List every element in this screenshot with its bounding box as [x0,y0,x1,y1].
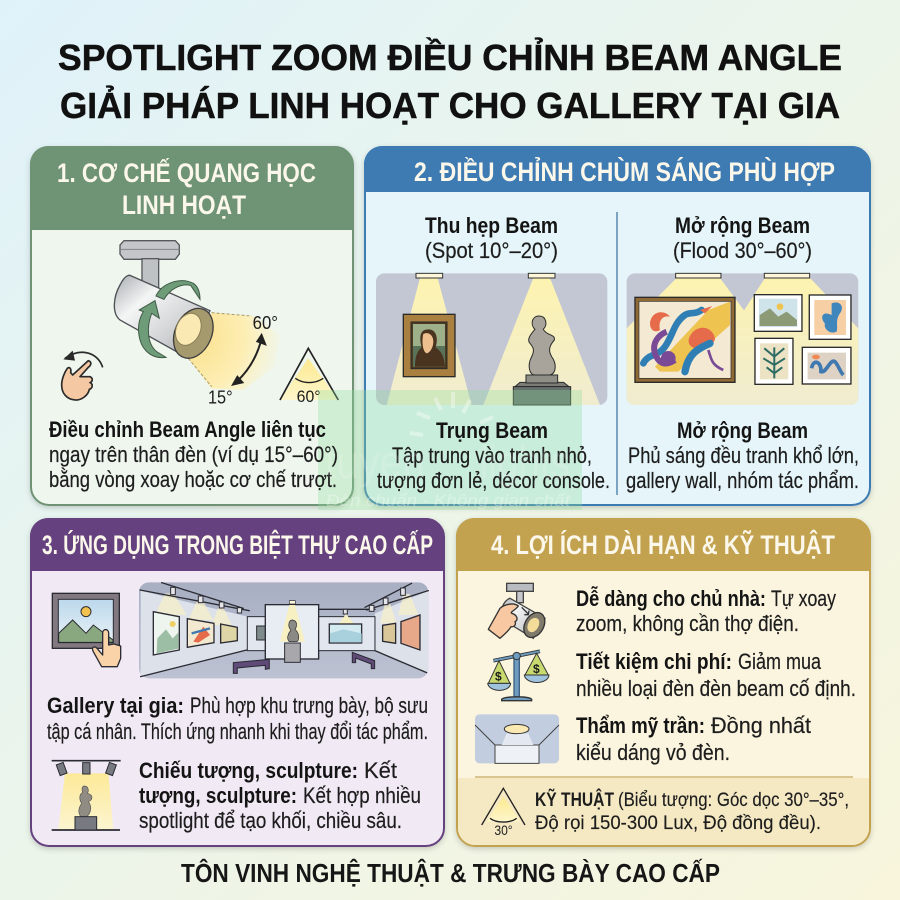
text: sculpture lighting: Chiếu tượng, sculpture: [139,758,358,783]
panel 2 header [364,146,870,192]
text: spot beam [377,418,610,493]
text: benefit easy: Dễ dàng cho chủ nhà: [576,586,766,611]
text: benefit ceiling [576,713,811,765]
icon: 30 degree cone: 30° [494,822,513,838]
icon: sculpture under three spotlights [52,761,121,830]
illustration: flood beams on gallery wall [627,273,858,405]
text: technical notes: (Biểu tượng: Góc dọc 30°–35°, [618,790,849,811]
text: flood beam: gallery wall, nhóm tác phẩm. [626,468,859,493]
watermark: lights [480,436,570,488]
text: sculpture lighting [139,758,421,833]
text: sculpture lighting: Kết hợp nhiều [303,783,421,808]
title: SPOTLIGHT ZOOM ĐIỀU CHỈNH BEAM ANGLE [58,37,842,78]
icon: hand turning [62,351,103,400]
watermark [325,392,571,510]
text: flood beam [626,418,859,493]
panel 1 header: LINH HOẠT [122,190,246,220]
panel 2 header: 2. ĐIỀU CHỈNH CHÙM SÁNG PHÙ HỢP [414,155,835,187]
text: technical notes [535,789,849,834]
icon: hand rotating spotlight [488,583,549,641]
text: flood beam: Phủ sáng đều tranh khổ lớn, [628,443,859,468]
text: home gallery [47,693,428,744]
text: benefit easy [576,586,836,636]
text: benefit ceiling: kiểu dáng vỏ đèn. [576,740,730,765]
subheading: narrow beam [425,213,558,263]
panel: 2 beam adjustment [364,146,870,510]
text: home gallery: Phù hợp khu trưng bày, bộ sưu [190,693,428,718]
text: benefit ceiling: Đồng nhất [711,713,811,738]
icon: 60 degree cone [280,348,338,406]
panel 3 header [30,518,444,571]
subheading: wide beam: (Flood 30°–60°) [673,238,812,263]
text: technical notes: KỸ THUẬT [535,789,614,811]
subheading: wide beam [673,213,812,263]
text: technical notes: Độ rọi 150-300 Lux, Độ đồng đều). [535,813,821,834]
illustration: narrow beams on portrait and statue [376,273,607,405]
panel 1 text: Điều chỉnh Beam Angle liên tục [49,417,326,442]
text: spot beam: Trụng Beam [436,418,548,443]
text: flood beam: Mở rộng Beam [677,418,808,443]
icon: ceiling downlight [475,714,559,763]
icon: zoom spotlight with beam [114,241,280,407]
title [58,37,842,126]
text: benefit cost: nhiều loại đèn đèn beam cố định. [576,676,856,701]
watermark: Đèn chuẩn - Không gian chất [326,491,571,510]
panel: 1 optical mechanism [30,146,364,510]
band: technical notes background [458,778,869,845]
text: benefit easy: zoom, không cần thợ điện. [576,611,799,636]
title: GIẢI PHÁP LINH HOẠT CHO GALLERY TẠI GIA [60,85,840,126]
text: sculpture lighting: tượng, sculpture: [139,783,297,808]
text: spot beam: tượng đơn lẻ, décor console. [377,468,610,493]
text: sculpture lighting: Kết [364,758,397,783]
icon: 60 degree cone: 60° [297,387,321,406]
watermark: tuyen [325,436,425,488]
icon: 30 degree cone [482,788,525,838]
text: benefit cost: Giảm mua [738,649,822,674]
panel 1 text: ngay trên thân đèn (ví dụ 15°–60°) [49,442,338,467]
panel 1 text [49,417,338,492]
text: benefit cost: Tiết kiệm chi phí: [576,649,732,674]
text: home gallery: Gallery tại gia: [47,693,184,718]
icon: balance scale with dollars [488,651,549,701]
text: benefit easy: Tự xoay [771,586,836,611]
panel 1 text: bằng vòng xoay hoặc cơ chế trượt. [49,467,337,492]
text: home gallery: tập cá nhân. Thích ứng nhanh khi thay đổi tác phẩm. [47,719,428,744]
panel 3 header: 3. ỨNG DỤNG TRONG BIỆT THỰ CAO CẤP [42,529,433,560]
icon: zoom spotlight with beam: 15° [208,386,233,407]
icon: balance scale with dollars: $ [495,670,502,684]
icon: framed picture with touch hand [52,593,121,667]
panel: 4 long-term benefits [456,518,870,846]
subheading: narrow beam: Thu hẹp Beam [425,213,558,238]
subheading: narrow beam: (Spot 10°–20°) [425,238,558,263]
panel: 3 villa application [30,518,444,846]
icon: balance scale with dollars: $ [533,662,540,676]
text: benefit ceiling: Thẩm mỹ trần: [576,713,705,738]
text: sculpture lighting: spotlight để tạo khối, chiều sâu. [139,808,402,833]
text: benefit cost [576,649,856,701]
panel 4 header [456,518,870,571]
panel 1 header [30,146,353,230]
text: spot beam: Tập trung vào tranh nhỏ, [392,443,592,468]
subheading: wide beam: Mở rộng Beam [675,213,810,238]
footer tagline: TÔN VINH NGHỆ THUẬT & TRƯNG BÀY CAO CẤP [181,858,720,888]
illustration: home gallery room [139,582,428,678]
panel 1 header: 1. CƠ CHẾ QUANG HỌC [57,157,316,188]
icon: zoom spotlight with beam: 60° [253,312,278,333]
